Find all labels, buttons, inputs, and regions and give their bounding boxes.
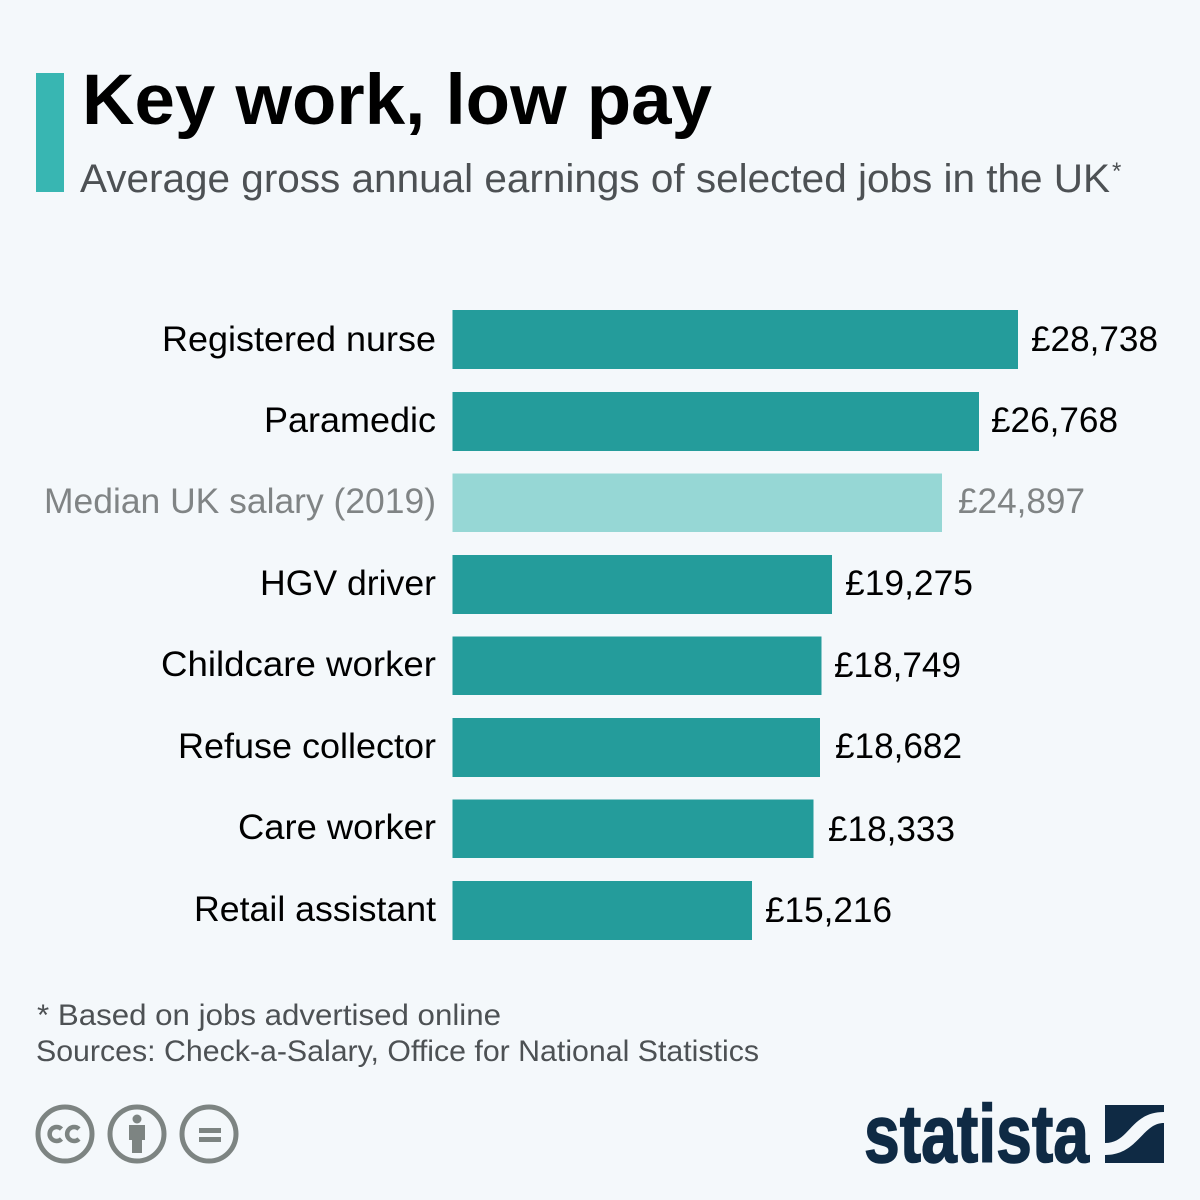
row: HGV driver <box>260 555 973 614</box>
icon: statista logo <box>1105 1105 1164 1163</box>
row: HGV driver: £19,275 <box>845 564 973 603</box>
row: Care worker: £18,333 <box>828 810 955 849</box>
row: Registered nurse <box>162 310 1158 369</box>
row: Registered nurse: Registered nurse <box>162 320 436 359</box>
row: Childcare worker: £18,749 <box>834 646 961 685</box>
subtitle: Average gross annual earnings of selected jobs in the UK <box>80 157 1110 201</box>
row: Retail assistant <box>194 881 892 940</box>
row: Retail assistant: £15,216 <box>765 891 892 930</box>
footnote and sources <box>36 999 759 1068</box>
footnote and sources: Sources: Check-a-Salary, Office for National Statistics <box>36 1035 759 1068</box>
title: Key work, low pay <box>82 61 713 140</box>
row: Registered nurse: £28,738 <box>1031 320 1158 359</box>
row: Retail assistant: Retail assistant <box>194 890 436 929</box>
icon: attribution <box>110 1107 164 1161</box>
row: Paramedic: Paramedic <box>264 401 436 440</box>
footnote and sources: * Based on jobs advertised online <box>37 999 501 1032</box>
row: Care worker: Care worker <box>238 808 436 847</box>
statista wordmark: statista <box>864 1089 1090 1180</box>
icon: creative commons <box>38 1107 92 1161</box>
row: Care worker <box>238 800 955 858</box>
row: Childcare worker <box>161 636 961 695</box>
row: Childcare worker: Childcare worker <box>161 645 436 684</box>
row: Refuse collector: £18,682 <box>835 727 962 766</box>
bar chart <box>44 310 1158 940</box>
row: Paramedic <box>264 392 1118 451</box>
header accent bar <box>36 73 64 192</box>
row: Paramedic: £26,768 <box>991 401 1118 440</box>
row: Median UK salary (2019) <box>44 474 1085 532</box>
row: Median UK salary (2019): £24,897 <box>958 482 1085 521</box>
row: Refuse collector: Refuse collector <box>178 727 436 766</box>
row: HGV driver: HGV driver <box>260 564 436 603</box>
row: Median UK salary (2019): Median UK salary (2019) <box>44 482 436 521</box>
row: Refuse collector <box>178 718 962 777</box>
subtitle: * <box>1112 158 1121 185</box>
icon: no derivatives <box>182 1107 236 1161</box>
